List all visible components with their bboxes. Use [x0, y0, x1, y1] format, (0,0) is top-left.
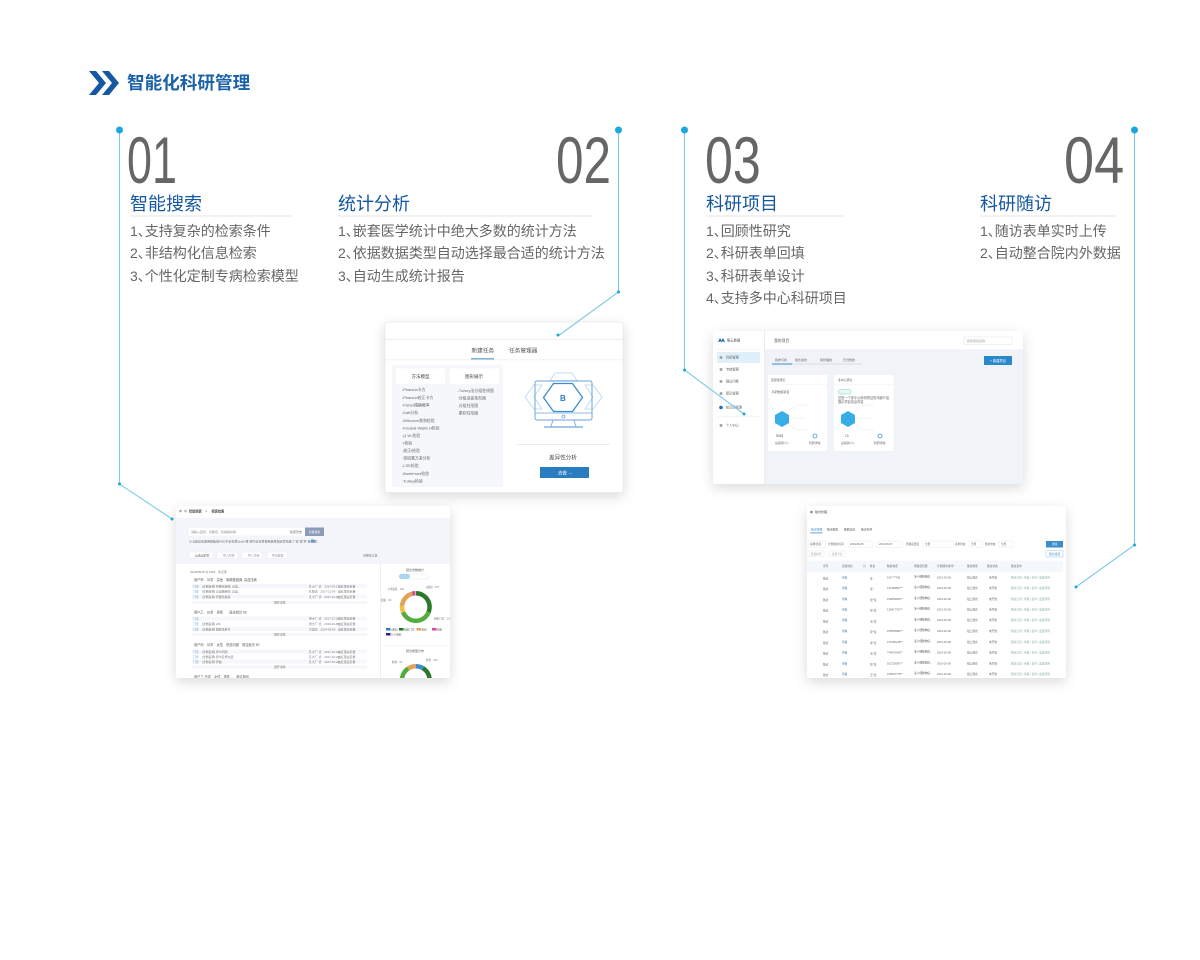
- tabs: 新建任务: [472, 346, 495, 354]
- table: 多小细胞肺癌...: [914, 628, 933, 632]
- table: 多小细胞肺癌...: [914, 639, 933, 643]
- table: 151****768: [887, 576, 901, 580]
- donut chart: 就诊类型分布: 检查 · 107: [426, 658, 438, 662]
- panel: 统计分析 screenshot: B: [560, 394, 566, 403]
- table: 多小细胞肺癌...: [914, 585, 933, 589]
- result list: [诊断名称] 肝炎及甲亢症: [202, 654, 233, 659]
- text block: 智能搜索 list: 1、支持复杂的检索条件: [130, 223, 271, 239]
- heading: 智能搜索: 智能搜索: [130, 194, 202, 214]
- table: 随访: [823, 620, 829, 624]
- result list: 血红蛋白定量: [338, 654, 355, 659]
- donut chart: 就诊次数统计: 组织门诊 · 126: [434, 616, 452, 620]
- connector: 03: [681, 126, 746, 416]
- text block: 科研项目 list: 4、支持多中心科研项目: [706, 290, 847, 306]
- button: 新建项目: + 新建项目: [990, 358, 1006, 363]
- filter row: [808, 541, 1013, 556]
- table: 线上随访: [967, 586, 978, 590]
- table: 未开始: [989, 576, 997, 580]
- table: 随访: [823, 630, 829, 634]
- table: 2019-02-08: [937, 629, 951, 633]
- sidebar menu: [717, 338, 760, 428]
- panel: 科研随访 screenshot: 批量导出: [832, 552, 843, 556]
- panel: 统计分析 screenshot: [385, 322, 623, 492]
- result list: 门诊: [193, 621, 199, 626]
- panel: 科研随访 screenshot: 2019-08-27: [879, 542, 893, 546]
- donut chart: 就诊次数统计: g组织 · 167: [426, 585, 440, 589]
- result list: 血红蛋白定量: [338, 621, 355, 626]
- table: 2019-02-08: [937, 597, 951, 601]
- table: 未开始: [989, 640, 997, 644]
- table: 随访记录 | 查看 | 表单 | 发送问卷: [1011, 586, 1050, 590]
- table: 随访记录 | 查看 | 表单 | 发送问卷: [1011, 597, 1050, 601]
- button: 去做: [540, 467, 589, 478]
- tabs: 任务管理器: [509, 346, 538, 354]
- panel: 智能搜索 screenshot: 智能搜索: [189, 508, 203, 514]
- table: 162729597**: [887, 662, 903, 666]
- card: 项目二: 科研详情: [874, 440, 886, 445]
- table: 137050148**: [887, 640, 903, 644]
- tabs: 已归档的: [843, 357, 855, 362]
- donut chart: 就诊类型分布: [381, 645, 450, 678]
- tabs: [811, 528, 872, 532]
- table: 随访: [823, 662, 829, 666]
- search bar: 智能搜索: [309, 530, 320, 534]
- table: 未开始: [989, 618, 997, 622]
- tabs: 我参与的: [775, 357, 787, 362]
- method list panel: -Pearson卡方: [402, 387, 426, 392]
- tabs: [472, 346, 538, 354]
- result list: 血红蛋白定量: [338, 626, 355, 632]
- text block: 智能搜索 list: [130, 223, 299, 284]
- table: 某*: [870, 587, 874, 591]
- card: 项目二: [834, 375, 894, 451]
- icon: double chevron: [89, 71, 119, 95]
- text block: 统计分析 list: 1、嵌套医学统计中绝大多数的统计方法: [338, 223, 577, 239]
- text block: 科研项目 list: 3、科研表单设计: [706, 268, 805, 284]
- panel: 科研项目 screenshot: 我的项目: [774, 338, 789, 343]
- table: 随访记录 | 查看 | 表单 | 发送问卷: [1011, 629, 1050, 633]
- panel: 科研随访 screenshot: 表单状态: [955, 542, 966, 546]
- panel: 智能搜索 screenshot: 导入科研: [223, 552, 235, 557]
- table: 多小细胞肺癌...: [914, 660, 933, 664]
- text block: 科研随访 list: [980, 223, 1121, 261]
- sidebar menu: 知识库管理: [726, 404, 743, 410]
- table: 多小细胞肺癌...: [914, 574, 933, 578]
- result list: 血红蛋白定量: [338, 594, 355, 599]
- method list panel: -单因素方差分析: [402, 456, 431, 460]
- table: 159507778**: [887, 672, 903, 676]
- table: 所属项目组: [914, 564, 928, 568]
- table: 王*某: [870, 673, 877, 677]
- table: 2019-02-08: [937, 662, 951, 666]
- method list panel: -分组柱形图: [458, 403, 478, 408]
- tabs: 我负责的: [795, 357, 807, 362]
- table: 张*某: [870, 608, 877, 612]
- result list: 门诊: [193, 584, 199, 588]
- panel: 科研随访 screenshot: 随访设置: [1049, 552, 1060, 556]
- result list: 血红蛋白定量: [338, 584, 355, 588]
- table: 未开始: [989, 586, 997, 590]
- card: 项目二: 总病例(人): [841, 440, 855, 445]
- result list: 孔大厂 诊 2017-10-24: [309, 654, 339, 659]
- result list: 门诊: [193, 626, 199, 632]
- number 01: 01: [127, 123, 177, 197]
- search bar: 请输入症状、诊断名、化验指标等: [191, 529, 236, 534]
- table: 随访记录 | 查看 | 表单 | 发送问卷: [1011, 672, 1050, 676]
- table: 随访记录 | 查看 | 表单 | 发送问卷: [1011, 640, 1050, 644]
- panel: 智能搜索 screenshot: 搜索结果: [212, 508, 225, 514]
- result list: 血红蛋白定量: [338, 659, 355, 664]
- result list: [诊断名称] p53: [202, 621, 221, 626]
- text block: 智能搜索 list: 3、个性化定制专病检索模型: [130, 268, 299, 284]
- donut chart: 就诊次数统计: 上呼吸道 · 106: [387, 587, 405, 591]
- result list: 门诊: [193, 659, 199, 664]
- text block: 统计分析 list: 2、依据数据类型自动选择最合适的统计方法: [338, 245, 605, 261]
- result list: 孔大厂 诊 2017-10-24: [309, 659, 339, 664]
- number 02: 02: [556, 123, 611, 197]
- heading: 科研随访: 科研随访: [980, 194, 1052, 214]
- table: 139917797**: [887, 608, 903, 612]
- donut chart: 就诊次数统计: [381, 567, 452, 636]
- table: 随访: [823, 608, 829, 612]
- table: [807, 560, 1063, 677]
- table: 未开始: [989, 650, 997, 654]
- sidebar menu: 团队管理: [726, 390, 740, 396]
- donut chart: 就诊次数统计: 组织门诊: [404, 628, 415, 632]
- method list panel: -累积柱形图: [458, 410, 478, 416]
- table: 2019-02-08: [937, 608, 951, 612]
- result list: 门诊: [193, 649, 199, 654]
- result list: 张大厂 诊 2017-12-15: [309, 616, 339, 620]
- table: 联系电话: [887, 564, 898, 568]
- table: 查看: [842, 650, 848, 654]
- result list: [190, 569, 367, 679]
- donut chart: 就诊次数统计: 组织: [437, 628, 443, 632]
- panel: 科研随访 screenshot: 病例/患者: [810, 542, 822, 546]
- filter buttons: [189, 552, 288, 558]
- table: 查看: [842, 662, 848, 666]
- table: 王*某: [870, 652, 877, 656]
- connector: 04: [1074, 126, 1138, 588]
- table: 2019-02-08: [937, 576, 951, 580]
- panel: 科研随访 screenshot: 计划随访时间: [828, 542, 844, 546]
- panel: 智能搜索 screenshot: [176, 506, 452, 694]
- panel: 智能搜索 screenshot: 可视化工具: [363, 552, 378, 557]
- table: 随访记录 | 查看 | 表单 | 发送问卷: [1011, 618, 1050, 622]
- sidebar menu: 科研管理: [726, 354, 740, 360]
- table: 随访: [823, 587, 829, 591]
- table: 线上随访: [967, 597, 978, 601]
- text block: 科研随访 list: 2、自动整合院内外数据: [980, 245, 1121, 261]
- result list: 孔大厂 诊 2017-03-17: [309, 584, 339, 588]
- panel: 智能搜索 screenshot: 导出数据: [272, 552, 284, 557]
- table: 随访表单: [1011, 564, 1022, 568]
- table: 多小细胞肺癌...: [914, 596, 933, 600]
- table: 线上随访: [967, 672, 978, 676]
- result list: 血红蛋白定量: [338, 588, 355, 594]
- card: 项目一: 总病例(人): [775, 440, 789, 445]
- heading: 科研项目: 科研项目: [706, 194, 778, 214]
- table: 随访: [823, 641, 829, 645]
- card: 项目一: [768, 375, 827, 451]
- table: 随访: [823, 598, 829, 602]
- table: 2019-02-08: [937, 618, 951, 622]
- table: 查看: [842, 597, 848, 601]
- tabs: 我管理的: [820, 357, 832, 362]
- table: 姓名: [870, 564, 876, 568]
- result list: 张大厂 诊 2016-03-05: [309, 621, 339, 626]
- table: 张*某: [870, 662, 877, 666]
- label: 差异性分析: 差异性分析: [549, 454, 577, 462]
- panel: 科研随访 screenshot: 全部: [1001, 542, 1007, 546]
- result list: [诊断名称] 高血脂疾病, 高血...: [202, 588, 240, 594]
- result list: 血红蛋白定量: [338, 616, 355, 620]
- method list panel: -Pearson校正卡方: [402, 395, 433, 400]
- result list: [诊断名称] 肝硬化疾病: [202, 594, 231, 599]
- table: 未开始: [989, 662, 997, 666]
- result list: 展开详情: [274, 664, 286, 669]
- panel: 科研随访 screenshot: [807, 506, 1066, 678]
- table: 随访记录 | 查看 | 表单 | 发送问卷: [1011, 576, 1050, 580]
- donut chart: 就诊类型分布: 就诊类型分布: [406, 648, 424, 653]
- table: 165565082**: [887, 629, 903, 633]
- donut chart: 就诊次数统计: 以下组织: [391, 632, 402, 636]
- card: 项目一: 科研详情: [809, 440, 821, 445]
- table: 未开始: [989, 597, 997, 601]
- table: 随访状态: [987, 564, 998, 568]
- button: 去做: 去做 →: [558, 470, 572, 476]
- table: 某: [870, 576, 873, 580]
- donut chart: 就诊次数统计: 组织 · 62: [381, 598, 392, 602]
- result list: 门诊: [193, 588, 199, 594]
- panel: 科研随访 screenshot: 随访状态: [985, 542, 996, 546]
- donut chart: 就诊次数统计: 组织: [422, 628, 427, 632]
- table: 线上随访: [967, 650, 978, 654]
- result list: [诊断名称] 肝脏: [202, 659, 222, 664]
- search bar: 检索历史: [290, 529, 302, 534]
- table: 张*某: [870, 598, 877, 602]
- result list: 用户丙 32岁 女性 肝癌问题 既往就诊 90: [194, 642, 260, 647]
- card: 项目二: 这是一个多中心科研项目的详细介绍: [838, 395, 889, 400]
- tabs: 随访外呼: [861, 528, 872, 532]
- table: 线上随访: [967, 576, 978, 580]
- table: 患者姓名: [842, 564, 853, 568]
- table: 查看: [842, 629, 848, 633]
- card: 项目一: 科研数据项目: [772, 389, 789, 394]
- result list: 门诊: [193, 654, 199, 659]
- table: 线上随访: [967, 662, 978, 666]
- table: 孙*某: [870, 630, 877, 634]
- table: 未开始: [989, 629, 997, 633]
- method list panel: -Bonferroni检验: [402, 471, 429, 476]
- sidebar menu: 个人中心: [726, 422, 740, 428]
- method list panel: -Q W-检验: [402, 433, 420, 438]
- donut chart: 就诊次数统计: 就诊次数统计: [406, 567, 424, 572]
- method list panel: 方法模型: [412, 373, 430, 380]
- table: 多小细胞肺癌...: [914, 606, 933, 610]
- method list panel: -Kruskal-Wallis H检验: [402, 426, 440, 430]
- table: 随访记录 | 查看 | 表单 | 发送问卷: [1011, 608, 1050, 612]
- panel: 科研随访 screenshot: 批量操作: [811, 552, 822, 556]
- connector: 02: [556, 126, 622, 336]
- table: 未开始: [989, 608, 997, 612]
- number 04: 04: [1064, 123, 1124, 197]
- table: 2019-02-08: [937, 650, 951, 654]
- table: 随访: [823, 673, 829, 677]
- panel: 科研随访 screenshot: 搜索: [1052, 542, 1058, 546]
- text block: 科研随访 list: 1、随访表单实时上传: [980, 223, 1107, 239]
- panel: 智能搜索 screenshot: >: [205, 510, 207, 514]
- table: 多小细胞肺癌...: [914, 671, 933, 675]
- table: 查看: [842, 608, 848, 612]
- text block: 统计分析 list: 3、自动生成统计报告: [338, 268, 465, 284]
- card: 项目一: 回顾性研究: [771, 377, 786, 382]
- table: 随访记录 | 查看 | 表单 | 发送问卷: [1011, 650, 1050, 654]
- table: 随访: [823, 652, 829, 656]
- text block: 统计分析 list: [338, 223, 605, 284]
- panel: 科研随访 screenshot: 随访管理: [815, 509, 827, 514]
- result list: 血红蛋白定量: [338, 649, 355, 654]
- table: 2019-02-08: [937, 640, 951, 644]
- result list: [诊断名称] 肝硬化疾病, 高血...: [202, 584, 240, 588]
- table: 线上随访: [967, 640, 978, 644]
- result list: 孔随访 2017-12-06: [309, 588, 336, 594]
- method list panel: -Turkey法分组柱线图: [458, 388, 494, 393]
- table: 线上随访: [967, 608, 978, 612]
- table: 多小细胞肺癌...: [914, 618, 933, 622]
- text block: 科研项目 list: 1、回顾性研究: [706, 223, 791, 239]
- panel: 智能搜索 screenshot: 导入项目: [248, 552, 260, 557]
- table: 计划随访时间*: [937, 564, 954, 568]
- result list: 万里诊 2014-03-05: [309, 626, 336, 632]
- donut chart: 就诊类型分布: 检验 · 63: [392, 660, 403, 664]
- table: 序号: [823, 564, 829, 568]
- table: 李*某: [870, 641, 877, 645]
- panel: 科研项目 screenshot: 搜索项目名称: [967, 338, 985, 343]
- table: 线上随访: [967, 618, 978, 622]
- sidebar menu: 集云数据: [727, 338, 741, 342]
- table: 王*某: [870, 620, 877, 624]
- text block: 科研项目 list: [706, 223, 847, 306]
- table: 查看: [842, 640, 848, 644]
- result list: 展开详情: [274, 600, 286, 604]
- method list panel: -LSD检验: [402, 463, 419, 468]
- card: 项目一: 5038: [776, 434, 783, 438]
- panel: 科研随访 screenshot: 2019-08-28: [850, 542, 864, 546]
- icon: monitor with hexagons: [525, 373, 602, 427]
- result list: 孔大厂 诊 2017-12-06: [309, 594, 339, 599]
- result list: [诊断名称] 肝炎问题: [202, 649, 228, 654]
- button: 新建项目: [984, 356, 1012, 365]
- sidebar menu: 随访问卷: [726, 378, 740, 384]
- connector: 01: [116, 126, 174, 520]
- table: 查看: [842, 586, 848, 590]
- result list: 门诊: [193, 616, 199, 621]
- result list: 用户乙 32岁 男性 既往就诊 66: [194, 610, 247, 614]
- tabs: [775, 357, 855, 362]
- panel: 智能搜索 screenshot: 全选当前页: [195, 552, 210, 557]
- result list: 孔大厂 诊 2017-10-24: [309, 649, 339, 654]
- table: 查看: [842, 576, 848, 580]
- tabs: 随访报告: [827, 528, 838, 532]
- method list panel: -Fisher精确概率: [402, 402, 430, 408]
- table: 未开始: [989, 672, 997, 676]
- method list panel: -Turkey检验: [402, 478, 423, 484]
- result list: [诊断名称] 脂肪性肝炎: [202, 626, 231, 632]
- sidebar menu: 专病管理: [726, 366, 740, 372]
- method list panel: -校正t检验: [402, 448, 420, 453]
- table: 2019-02-08: [937, 586, 951, 590]
- number 03: 03: [705, 123, 761, 197]
- tabs: 随访管理: [811, 528, 822, 532]
- method list panel: -Kafr分析: [402, 410, 418, 415]
- table: 多小细胞肺癌...: [914, 650, 933, 654]
- title: 智能化科研管理: [127, 73, 250, 93]
- table: 随访: [823, 576, 829, 580]
- result list: 展开详情: [274, 632, 286, 636]
- panel: 科研随访 screenshot: 全部: [925, 542, 931, 546]
- table: 2019-02-08: [937, 672, 951, 676]
- table: 线上随访: [967, 629, 978, 633]
- result list: 用户丁 不详 女性 男性 既往就诊: [194, 674, 250, 679]
- method list panel: -t检验: [402, 440, 412, 446]
- table: 随访记录 | 查看 | 表单 | 发送问卷: [1011, 662, 1050, 666]
- panel: 科研随访 screenshot: 所属项目组: [906, 542, 919, 546]
- method list panel: -分组误差条形图: [458, 396, 486, 400]
- method list panel: -Wilcoxon秩和检验: [402, 418, 435, 423]
- table: 137386827**: [887, 586, 903, 590]
- method list panel: [392, 365, 503, 487]
- heading: 统计分析: 统计分析: [338, 194, 410, 214]
- result list: 2020/05/18 为 1862 · 条记录: [190, 569, 227, 574]
- card: 项目二: 多中心研究: [838, 377, 853, 382]
- table: 150869900**: [887, 597, 903, 601]
- panel: 智能搜索 screenshot: 小七建议您使用模板或AND不必在意(and)"或"或不必在意使用括号指定优先级了"非"或"并"等需要...: [189, 538, 319, 544]
- table: 查看: [842, 672, 848, 676]
- search bar: [189, 528, 324, 536]
- panel: 科研随访 screenshot: 全部: [971, 542, 977, 546]
- donut chart: 就诊次数统计: g组织: [391, 628, 398, 632]
- result list: 门诊: [193, 594, 199, 599]
- card: 项目二: 展示项目信息内容: [838, 399, 864, 404]
- method list panel: 图形展示: [465, 373, 483, 380]
- text block: 科研项目 list: 2、科研表单回填: [706, 245, 805, 261]
- result list: 用户甲 32岁 高危 肿瘤基因病, 高血压病: [194, 577, 258, 582]
- table: 查看: [842, 618, 848, 622]
- table: 随访类型: [967, 564, 978, 568]
- text block: 智能搜索 list: 2、非结构化信息检索: [130, 245, 257, 261]
- tabs: 数据表单: [844, 528, 855, 532]
- card: 项目二: 13: [845, 434, 849, 438]
- table: 744576495**: [887, 650, 903, 654]
- panel: 科研项目 screenshot: [713, 331, 1023, 484]
